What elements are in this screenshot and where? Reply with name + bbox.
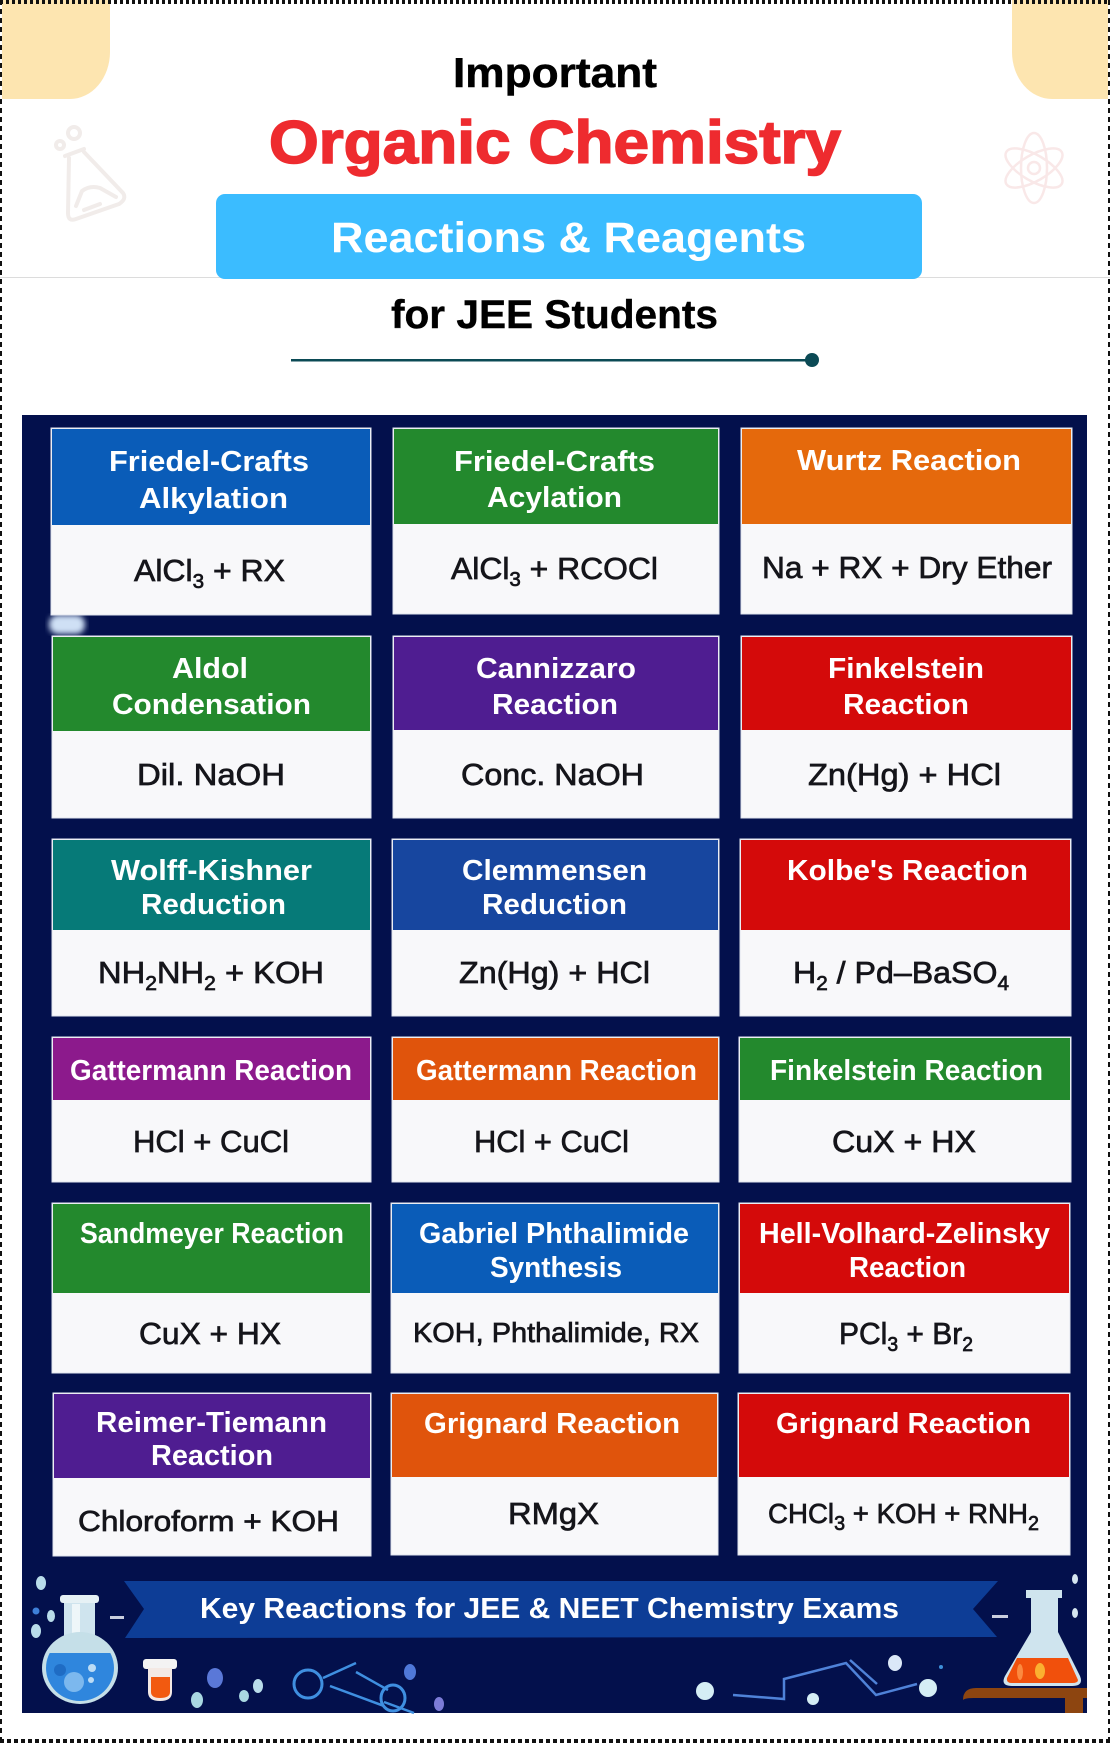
card: Gabriel Phthalimide Synthesis: Synthesis [490,1252,622,1284]
ribbon banner: Key Reactions for JEE & NEET Chemistry Exams [200,1593,899,1625]
card: Kolbe's Reaction: H [793,955,815,990]
card: Wolff-Kishner Reduction: 2 [204,973,216,995]
card: Finkelstein Reaction (red) [741,636,1072,818]
card: Hell-Volhard-Zelinsky Reaction: + Br [898,1316,962,1351]
icon: wood stand [963,1688,1087,1713]
panel: navy reactions board [22,415,1087,1713]
card: Clemmensen Reduction: Reduction [482,889,627,921]
card: Clemmensen Reduction: Clemmensen [462,855,647,887]
card: Friedel-Crafts Acylation: Friedel-Crafts [454,446,655,478]
card: Aldol Condensation: Dil. NaOH [137,757,285,792]
card: Aldol Condensation: Aldol [172,653,248,685]
card: Kolbe's Reaction: 2 [816,973,828,995]
glow blob [49,615,85,634]
card: Sandmeyer Reaction [52,1203,371,1373]
card: Friedel-Crafts Alkylation: Friedel-Crafts [109,446,309,478]
card: Friedel-Crafts Acylation: AlCl [451,551,508,586]
icon: conical flask [1004,1590,1081,1686]
heading: for JEE Students: for JEE Students [391,293,718,337]
bubbles right [696,1574,1078,1705]
card: Reimer-Tiemann Reaction: Reaction [151,1440,273,1472]
card: Wolff-Kishner Reduction: Reduction [141,889,286,921]
card: Friedel-Crafts Acylation: 3 [509,569,521,591]
card: Sandmeyer Reaction: CuX + HX [139,1316,281,1351]
card: Aldol Condensation: Condensation [112,689,311,721]
ribbon banner [124,1581,998,1638]
card: Wolff-Kishner Reduction: NH [157,955,204,990]
card: Wolff-Kishner Reduction: NH [98,955,143,990]
card: Wolff-Kishner Reduction: 2 [145,973,157,995]
icon: faint flask [56,127,124,220]
card: Gattermann Reaction (orange): HCl + CuCl [474,1124,629,1159]
card: Cannizzaro Reaction [393,636,719,818]
card: Aldol Condensation [52,636,371,818]
molecule left [294,1663,414,1713]
card: Wurtz Reaction: Na + RX + Dry Ether [762,550,1052,585]
card: Grignard Reaction (orange) [391,1393,718,1555]
card: Wolff-Kishner Reduction: + KOH [216,955,324,990]
card: Finkelstein Reaction (green) [739,1037,1071,1182]
card: Friedel-Crafts Alkylation: AlCl [134,553,191,588]
card: Hell-Volhard-Zelinsky Reaction: 2 [962,1334,973,1356]
card: Grignard Reaction (red): Grignard Reaction [776,1408,1031,1440]
card: Finkelstein Reaction (red): Reaction [843,689,969,721]
card: Kolbe's Reaction: 4 [997,973,1009,995]
card: Friedel-Crafts Alkylation: + RX [204,553,285,588]
bubbles left [31,1576,444,1711]
card: Finkelstein Reaction (red): Zn(Hg) + HCl [808,757,1001,792]
card: Grignard Reaction (red): CHCl [768,1498,835,1529]
card: Clemmensen Reduction [392,839,719,1016]
corner decoration: top right [1012,0,1108,99]
card: Reimer-Tiemann Reaction [53,1393,371,1556]
card: Gattermann Reaction (magenta): Gattermann Reaction [70,1055,352,1087]
card: Clemmensen Reduction: Zn(Hg) + HCl [459,955,650,990]
card: Gabriel Phthalimide Synthesis [391,1203,719,1373]
card: Wurtz Reaction [741,428,1072,614]
card: Kolbe's Reaction: Kolbe's Reaction [787,855,1028,887]
card: Hell-Volhard-Zelinsky Reaction: PCl [839,1316,889,1351]
card: Grignard Reaction (orange): RMgX [508,1496,599,1531]
card: Grignard Reaction (red) [738,1393,1070,1555]
card: Gabriel Phthalimide Synthesis: KOH, Phthalimide, RX [413,1317,699,1348]
card: Gabriel Phthalimide Synthesis: Gabriel Phthalimide [419,1218,689,1250]
card: Kolbe's Reaction: / Pd–BaSO [828,955,997,990]
card: Hell-Volhard-Zelinsky Reaction: Hell-Volhard-Zelinsky [759,1218,1050,1250]
card: Cannizzaro Reaction: Conc. NaOH [461,757,644,792]
card: Friedel-Crafts Alkylation: 3 [193,571,204,593]
card: Gattermann Reaction (magenta) [52,1037,371,1182]
decorative rule with dot [291,353,819,367]
molecule right [733,1660,917,1699]
card: Wolff-Kishner Reduction: Wolff-Kishner [111,855,312,887]
card: Friedel-Crafts Alkylation: Alkylation [139,483,288,515]
icon: test tube [143,1659,177,1701]
card: Reimer-Tiemann Reaction: Chloroform + KOH [78,1506,339,1538]
card: Kolbe's Reaction [740,839,1071,1016]
card: Wurtz Reaction: Wurtz Reaction [797,445,1021,477]
divider line behind pill [0,277,1110,278]
subtitle pill: Reactions & Reagents [216,194,922,279]
card: Finkelstein Reaction (red): Finkelstein [828,653,984,685]
card: Finkelstein Reaction (green): Finkelstein Reaction [770,1055,1043,1087]
corner decoration: top left [2,0,110,99]
heading: Important: Important [453,49,657,96]
card: Grignard Reaction (orange): Grignard Reaction [424,1408,680,1440]
card: Grignard Reaction (red): 3 [834,1513,845,1535]
icon: faint atom [1000,133,1068,203]
card: Reimer-Tiemann Reaction: Reimer-Tiemann [96,1407,327,1439]
card: Gattermann Reaction (orange) [392,1037,719,1182]
card: Sandmeyer Reaction: Sandmeyer Reaction [80,1218,344,1250]
card: Gattermann Reaction (magenta): HCl + CuCl [133,1124,289,1159]
card: Friedel-Crafts Alkylation [51,428,371,615]
card: Cannizzaro Reaction: Cannizzaro [476,653,636,685]
card: Grignard Reaction (red): 2 [1028,1513,1039,1535]
card: Grignard Reaction (red): + KOH + RNH [845,1498,1028,1529]
card: Gattermann Reaction (orange): Gattermann Reaction [416,1055,697,1087]
card: Hell-Volhard-Zelinsky Reaction: 3 [887,1334,898,1356]
icon: round-bottom flask [42,1595,118,1704]
card: Hell-Volhard-Zelinsky Reaction [739,1203,1070,1373]
card: Finkelstein Reaction (green): CuX + HX [832,1124,976,1159]
card: Friedel-Crafts Acylation [393,428,719,614]
heading: Organic Chemistry: Organic Chemistry [269,109,842,176]
card: Friedel-Crafts Acylation: Acylation [487,482,622,514]
card: Cannizzaro Reaction: Reaction [492,689,618,721]
card: Hell-Volhard-Zelinsky Reaction: Reaction [849,1252,966,1284]
card: Wolff-Kishner Reduction [52,839,371,1016]
card: Friedel-Crafts Acylation: + RCOCl [521,551,658,586]
subtitle pill: Reactions & Reagents: Reactions & Reagents [331,214,806,262]
